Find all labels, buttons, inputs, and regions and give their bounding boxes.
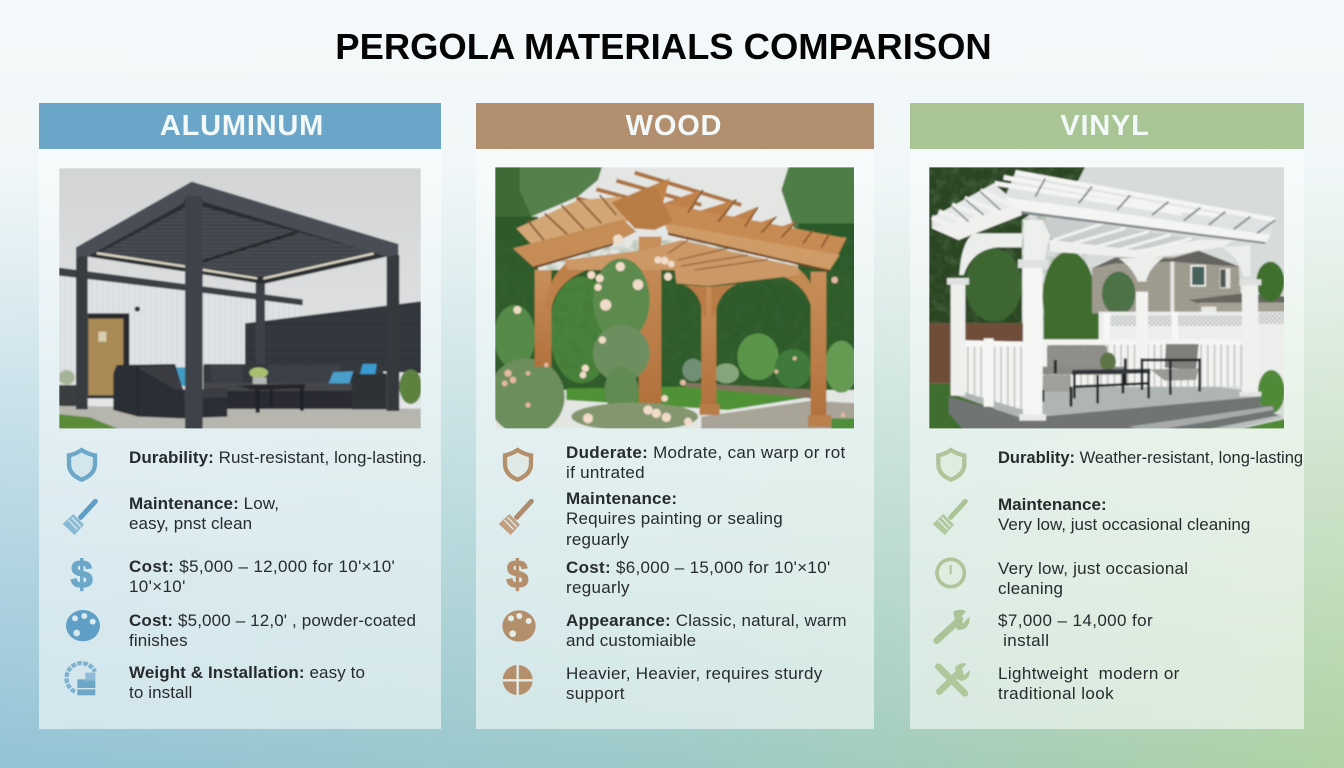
- icon: palette: [502, 610, 536, 642]
- text block: wood weight: Heavier, Heavier, requires sturdy: [566, 664, 823, 683]
- photo: aluminum pergola: [59, 168, 421, 428]
- panel: wood: [476, 103, 874, 729]
- text block: wood weight: [566, 664, 823, 703]
- right main beam: [665, 223, 840, 270]
- left lattice: [516, 197, 635, 246]
- text block: wood durability: Duderate: Modrate, can warp or rot: [566, 443, 845, 462]
- underside rafters and back beam: [565, 240, 800, 286]
- icons: wood: [498, 447, 536, 695]
- icons: vinyl: [932, 448, 970, 697]
- text block: wood cost: [566, 558, 830, 597]
- climbing roses foliage: [593, 258, 650, 342]
- text block: aluminum maintenance: easy, pnst clean: [129, 514, 252, 533]
- panel: vinyl: [910, 103, 1304, 729]
- left bush: [494, 305, 535, 368]
- title: PERGOLA MATERIALS COMPARISON: [335, 26, 992, 67]
- front post: [1023, 267, 1042, 417]
- back rail: [1042, 340, 1242, 387]
- text block: vinyl durability: Durablity: Weather-resistant, long-lasting: [998, 449, 1303, 467]
- icon: tools: [938, 663, 970, 693]
- left post: [76, 255, 88, 409]
- text block: vinyl cleaning: Very low, just occasional: [998, 559, 1188, 578]
- heading: wood: [476, 103, 874, 149]
- back post: [256, 282, 265, 365]
- sofa left: [113, 364, 227, 418]
- text block: vinyl cleaning: cleaning: [998, 579, 1063, 598]
- text block: aluminum cost: Cost: $5,000 – 12,000 for 10'×10': [129, 557, 395, 576]
- left main beam: [513, 219, 636, 267]
- photo: vinyl pergola: [929, 167, 1284, 428]
- heading: vinyl: VINYL: [1060, 110, 1150, 142]
- text block: wood appearance: and customiaible: [566, 631, 696, 650]
- braces: [959, 233, 1022, 275]
- text block: aluminum cost: [129, 557, 395, 596]
- heading: vinyl: [910, 103, 1304, 149]
- text block: wood durability: [566, 443, 846, 482]
- text block: wood maintenance: reguarly: [566, 530, 629, 549]
- wood fence: [925, 323, 1024, 383]
- icon: dollar: $: [71, 553, 93, 597]
- icon: palette: [66, 610, 100, 641]
- top slats: [995, 172, 1275, 220]
- white fence: [1099, 312, 1287, 385]
- top purlins: [576, 173, 741, 208]
- text block: aluminum weight: Weight & Installation: easy to: [129, 663, 365, 682]
- cushions: [176, 367, 185, 387]
- text block: aluminum finish: Cost: $5,000 – 12,0' , powder-coated: [129, 611, 416, 630]
- posts: [701, 287, 716, 407]
- furniture: [1047, 345, 1107, 368]
- bushes: [737, 333, 779, 380]
- grass and path: [566, 387, 808, 410]
- back beam: [1049, 240, 1235, 258]
- text block: wood maintenance: Requires painting or sealing: [566, 509, 783, 528]
- roof underside: [88, 198, 387, 284]
- text block: aluminum finish: [129, 611, 416, 650]
- plant: [249, 367, 268, 378]
- icon: cross-section: [503, 665, 533, 695]
- heading: wood: WOOD: [626, 110, 722, 142]
- braces: [685, 284, 737, 317]
- trees: [518, 167, 602, 218]
- text block: vinyl cost: $7,000 – 14,000 for: [998, 611, 1153, 630]
- icon: shield: [505, 450, 531, 480]
- text block: aluminum durability: Durability: Rust-resistant, long-lasting.: [129, 448, 427, 467]
- text block: wood durability: if untrated: [566, 463, 645, 482]
- text block: vinyl look: Lightweight modern or: [998, 664, 1180, 683]
- back posts: [1136, 292, 1148, 358]
- text block: wood appearance: Appearance: Classic, natural, warm: [566, 611, 847, 630]
- text block: wood cost: Cost: $6,000 – 15,000 for 10'×10': [566, 558, 830, 577]
- right lattice blocks: [628, 178, 847, 239]
- icon: wrench: [937, 610, 970, 641]
- text block: vinyl cost: install: [1003, 631, 1049, 650]
- text block: vinyl look: [998, 664, 1180, 703]
- icon: clock: [937, 559, 964, 587]
- text block: aluminum weight: [129, 663, 365, 702]
- roof fascia: [76, 182, 398, 257]
- text block: vinyl cleaning: [998, 559, 1188, 598]
- icon: dollar: $: [506, 553, 528, 597]
- icon: paint brush: [63, 501, 95, 535]
- text block: vinyl cost: [998, 611, 1153, 650]
- sofa back: [203, 364, 383, 384]
- panel: aluminum: [39, 103, 441, 729]
- text block: wood maintenance: [566, 489, 783, 549]
- house: [1092, 251, 1242, 313]
- text block: vinyl maintenance: [998, 495, 1250, 534]
- text block: aluminum cost: 10'×10': [129, 577, 186, 596]
- center knot: [612, 198, 672, 231]
- deck: [949, 396, 1282, 432]
- text block: vinyl maintenance: Maintenance:: [998, 495, 1107, 514]
- icon: shield: [69, 450, 95, 480]
- left rail: [964, 346, 1024, 410]
- text block: wood cost: reguarly: [566, 578, 630, 597]
- front left beam: [932, 205, 1022, 240]
- underside rafters: [1043, 218, 1199, 250]
- icon: installation: [66, 663, 95, 695]
- front post: [185, 196, 203, 433]
- icons: aluminum: [62, 447, 100, 696]
- icon: paint brush: [499, 501, 531, 535]
- text block: aluminum maintenance: Maintenance: Low,: [129, 494, 279, 513]
- front right beam: [1005, 197, 1270, 243]
- table: [237, 384, 305, 390]
- flower clusters: [513, 234, 692, 426]
- icon: shield: [938, 450, 964, 480]
- heading: aluminum: ALUMINUM: [160, 110, 324, 142]
- photo: wood pergola: [495, 167, 854, 428]
- text block: wood appearance: [566, 611, 847, 650]
- text block: wood maintenance: Maintenance:: [566, 489, 677, 508]
- right post: [387, 255, 399, 411]
- text block: aluminum maintenance: [129, 494, 279, 533]
- roof top fill: [1005, 172, 1275, 235]
- text block: aluminum finish: finishes: [129, 631, 188, 650]
- text block: vinyl look: traditional look: [998, 684, 1114, 703]
- dark trees: [925, 163, 1087, 323]
- text block: aluminum weight: to install: [129, 683, 192, 702]
- text block: vinyl maintenance: Very low, just occasional cleaning: [998, 515, 1250, 534]
- text block: wood weight: support: [566, 684, 625, 703]
- heading: aluminum: [39, 103, 441, 149]
- grass: [925, 383, 995, 432]
- icon: paint brush: [933, 501, 965, 535]
